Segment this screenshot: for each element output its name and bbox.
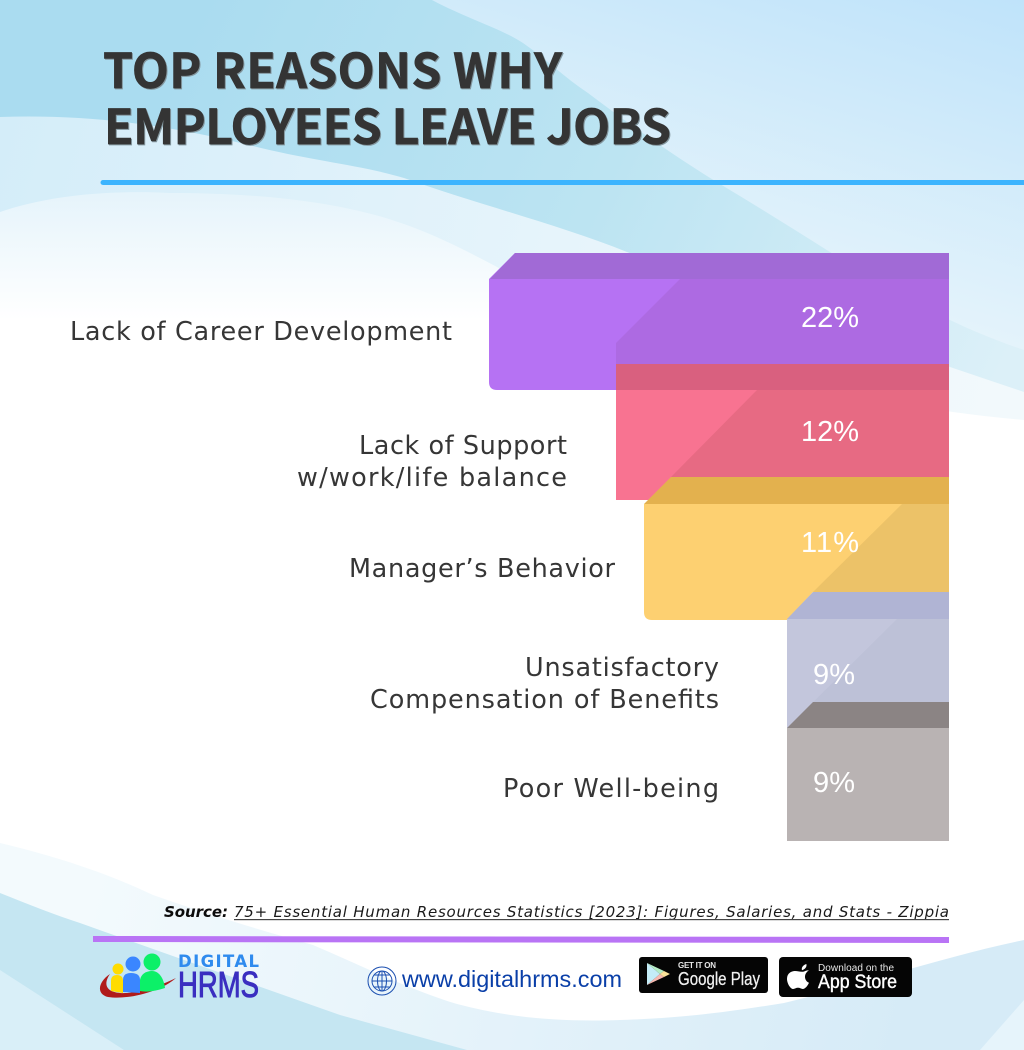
footer divider <box>93 936 949 943</box>
bar: manager's behavior 11% <box>644 477 949 620</box>
source line: Source: <box>164 903 228 921</box>
badge: google play <box>639 957 768 993</box>
label: lack of support: w/work/life balance <box>297 463 567 493</box>
source line: 75+ Essential Human Resources Statistics [2023]: Figures, Salaries, and Stats - Zippia <box>234 903 949 921</box>
badge: app store: Download on the <box>818 963 894 974</box>
icon: people with swoosh <box>100 954 176 998</box>
icon: apple <box>787 964 809 989</box>
badge: google play: Google Play <box>678 968 761 989</box>
logo: digital hrms: HRMS <box>178 964 259 1005</box>
stepped bar chart <box>489 253 949 841</box>
bar: lack of support 12% <box>616 364 949 500</box>
label: poor well-being: Poor Well-being <box>503 774 719 804</box>
title <box>103 32 671 158</box>
title: EMPLOYEES LEAVE JOBS <box>104 88 671 158</box>
label: unsatisfactory compensation: Compensation of Benefits <box>370 685 719 715</box>
value: 22%: 22% <box>801 302 859 334</box>
label: unsatisfactory compensation: Unsatisfactory <box>525 653 719 683</box>
icon: globe <box>368 967 396 995</box>
value: 12%: 12% <box>801 416 859 448</box>
value: 11%: 11% <box>801 527 859 559</box>
label: manager's behavior: Manager’s Behavior <box>349 554 616 584</box>
wordmark: DIGITAL <box>178 952 259 971</box>
label: lack of career development: Lack of Career Development <box>70 317 452 347</box>
icon: play triangle <box>647 963 670 985</box>
bar: unsatisfactory compensation 9% <box>787 592 949 728</box>
label: lack of support: Lack of Support <box>359 431 567 461</box>
badge: app store: App Store <box>818 971 897 993</box>
badge: google play: GET IT ON <box>678 961 716 970</box>
label: lack of support <box>297 431 567 493</box>
bar: lack of career development 22% <box>489 253 949 390</box>
value: 9% well-being: 9% <box>813 767 855 799</box>
title: TOP REASONS WHY <box>103 32 563 102</box>
logo: digital hrms <box>100 952 259 1005</box>
value: 9% compensation: 9% <box>813 659 855 691</box>
badge: app store <box>779 957 912 997</box>
title underline <box>100 180 1024 185</box>
bar: poor well-being 9% <box>787 702 949 841</box>
label: unsatisfactory compensation <box>370 653 719 715</box>
website link: www.digitalhrms.com <box>401 966 622 992</box>
